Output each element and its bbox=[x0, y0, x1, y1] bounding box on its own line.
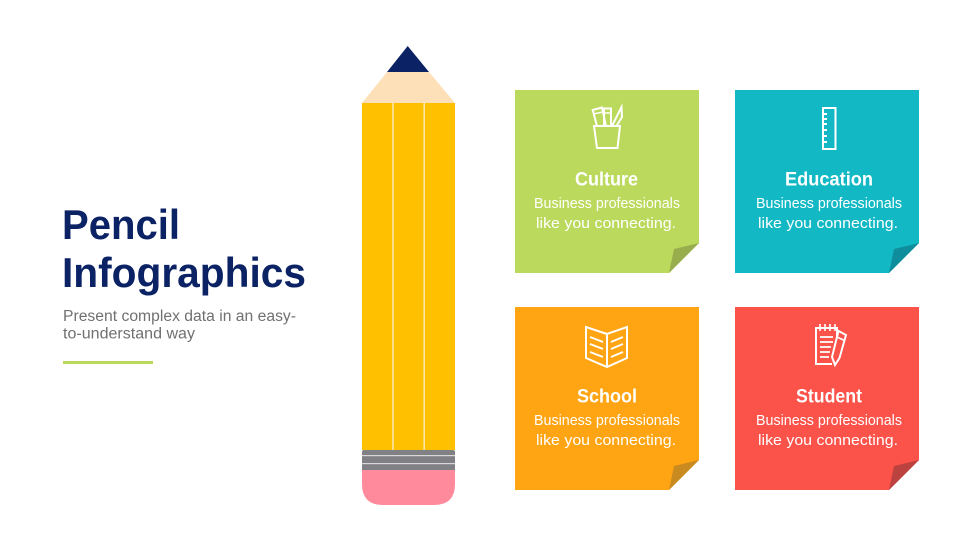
card body text: Business professionals bbox=[756, 412, 902, 429]
pencil graphite point bbox=[387, 46, 429, 72]
title: Infographics bbox=[62, 249, 306, 296]
card body text: Business professionals bbox=[756, 195, 902, 212]
subtitle text: Present complex data in an easy- bbox=[63, 308, 296, 325]
panel: school bbox=[515, 307, 699, 490]
icon: notepad and pencil bbox=[816, 324, 846, 365]
panel: culture bbox=[515, 90, 699, 273]
title: Pencil bbox=[62, 201, 180, 248]
card heading: School bbox=[577, 386, 637, 408]
title bbox=[62, 201, 306, 296]
card body text bbox=[756, 195, 902, 232]
card heading: Culture bbox=[575, 170, 638, 190]
pencil body stripes bbox=[392, 103, 425, 450]
card background bbox=[515, 307, 699, 490]
folded corner bbox=[669, 243, 699, 273]
card body text bbox=[534, 195, 680, 232]
icon: ruler bbox=[823, 108, 836, 149]
card heading: Education bbox=[785, 170, 873, 190]
pencil eraser bbox=[362, 470, 455, 505]
card heading: Student bbox=[796, 386, 863, 408]
accent underline bbox=[63, 361, 153, 364]
card body text: like you connecting. bbox=[536, 215, 676, 232]
card body text bbox=[534, 412, 680, 449]
card body text: Business professionals bbox=[534, 195, 680, 212]
subtitle text: to-understand way bbox=[63, 326, 195, 342]
pencil wood tip bbox=[362, 72, 455, 103]
card body text: like you connecting. bbox=[536, 432, 676, 449]
pencil ferrule bbox=[362, 450, 455, 470]
pencil illustration bbox=[362, 46, 455, 505]
card body text bbox=[756, 412, 902, 449]
panel: student bbox=[735, 307, 919, 490]
panel: education bbox=[735, 90, 919, 273]
card background bbox=[515, 90, 699, 273]
folded corner bbox=[669, 460, 699, 490]
subtitle text bbox=[63, 308, 296, 342]
icon: pencil cup bbox=[593, 107, 622, 148]
card body text: like you connecting. bbox=[758, 432, 898, 449]
card body text: like you connecting. bbox=[758, 215, 898, 232]
folded corner bbox=[889, 460, 919, 490]
card body text: Business professionals bbox=[534, 412, 680, 429]
card background bbox=[735, 307, 919, 490]
pencil body bbox=[362, 103, 455, 450]
folded corner bbox=[889, 243, 919, 273]
icon: open book bbox=[586, 327, 627, 367]
card background bbox=[735, 90, 919, 273]
